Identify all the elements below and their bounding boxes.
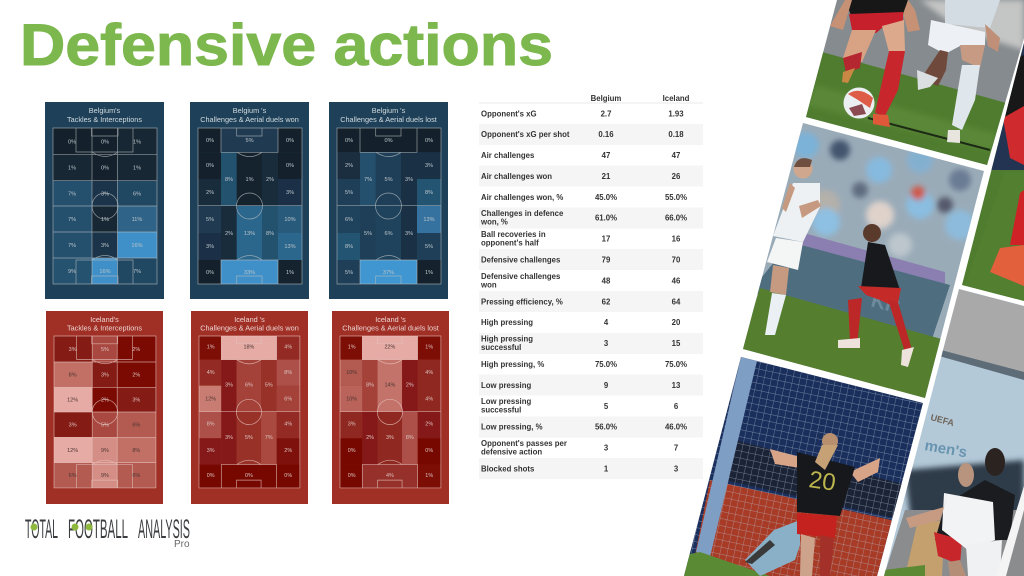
- heatmap pitch: 2%: [406, 383, 414, 389]
- table rows: 16: [672, 235, 681, 244]
- heatmap pitch: 5%: [265, 383, 273, 389]
- heatmap pitch: [53, 128, 157, 284]
- heatmap pitch: 4%: [284, 422, 292, 428]
- table header: [591, 94, 690, 103]
- table rows: 56.0%: [595, 423, 617, 432]
- heatmap pitch: 33%: [244, 270, 255, 276]
- heatmap pitch: 5%: [245, 138, 254, 144]
- Belgium player: [838, 224, 914, 367]
- heatmap pitch: 8%: [284, 370, 292, 376]
- heatmap pitch: 14%: [385, 383, 396, 389]
- table rows: 26: [672, 172, 681, 181]
- heatmap pitch: 6%: [133, 192, 141, 198]
- heatmap pitch: 3%: [101, 243, 109, 249]
- heatmap pitch: 0%: [348, 448, 356, 454]
- table rows: 2.7: [601, 109, 611, 118]
- panel title: [340, 106, 437, 124]
- table rows: 47: [672, 151, 680, 160]
- heatmap pitch: 0%: [425, 138, 433, 144]
- heatmap pitch: 9%: [101, 473, 109, 479]
- table rows: 3: [604, 339, 609, 348]
- heatmap pitch: 1%: [133, 140, 141, 146]
- heatmap pitch: 2%: [366, 435, 374, 441]
- heatmap pitch: 12%: [67, 448, 78, 454]
- table rows: Low pressing: [481, 397, 531, 406]
- panel title: Challenges & Aerial duels lost: [340, 115, 437, 124]
- heatmap pitch: 0%: [286, 163, 294, 169]
- table rows: [480, 109, 687, 474]
- heatmap pitch: 8%: [366, 383, 374, 389]
- text: ANALYSIS: [138, 514, 190, 544]
- heatmap pitch: 3%: [405, 177, 413, 183]
- heatmap pitch: 5%: [101, 423, 109, 429]
- heatmap pitch: 9%: [68, 269, 76, 275]
- heatmap pitch: 13%: [284, 244, 296, 250]
- heatmap pitch: 2%: [132, 372, 140, 378]
- table rows: 3: [604, 444, 609, 453]
- goal post: [1000, 486, 1024, 576]
- Belgium player: [830, 0, 920, 127]
- heatmap pitch: 0%: [207, 473, 215, 479]
- panel title: Tackles & Interceptions: [67, 115, 142, 124]
- table rows: High pressing: [481, 318, 533, 327]
- heatmap pitch: 3%: [225, 435, 233, 441]
- football: [844, 88, 874, 118]
- heatmap pitch: 2%: [132, 347, 140, 353]
- table rows: 46.0%: [665, 423, 687, 432]
- heatmap pitch: 8%: [225, 177, 233, 183]
- table rows: Low pressing: [481, 381, 531, 390]
- table rows: won, %: [480, 218, 508, 227]
- heatmap pitch: 2%: [425, 422, 433, 428]
- heatmap pitch: 3%: [207, 448, 215, 454]
- heatmap pitch: 22%: [385, 345, 396, 351]
- heatmap pitch: [340, 336, 441, 488]
- table rows: Blocked shots: [481, 464, 535, 474]
- logo: Total Football Analysis Pro: [25, 514, 190, 550]
- photo: crowd and players: KR: [869, 290, 903, 318]
- heatmap pitch: 5%: [245, 435, 253, 441]
- heatmap pitch: [198, 128, 302, 284]
- heatmap pitch: 5%: [364, 231, 372, 237]
- logo: Total Football Analysis Pro: TOTAL: [25, 514, 58, 544]
- title: Defensive actions: [20, 13, 553, 78]
- heatmap pitch: 1%: [348, 345, 356, 351]
- heatmap pitch: 7%: [265, 435, 273, 441]
- heatmap pitch: 7%: [68, 243, 76, 249]
- panel title: Iceland's: [90, 315, 119, 324]
- table rows: won: [480, 280, 497, 289]
- table rows: High pressing, %: [481, 360, 544, 369]
- heatmap pitch: 3%: [386, 435, 394, 441]
- heatmap pitch: 3%: [132, 398, 140, 404]
- heatmap pitch: 12%: [205, 396, 216, 402]
- heatmap pitch: 0%: [68, 140, 76, 146]
- table rows: Challenges in defence: [481, 209, 564, 218]
- table rows: 46: [672, 276, 681, 285]
- heatmap pitch: 8%: [406, 435, 414, 441]
- table rows: Opponent's passes per: [481, 439, 567, 448]
- panel title: Belgium 's: [233, 106, 267, 115]
- table rows: 64: [672, 297, 681, 306]
- heatmap pitch: 0%: [206, 138, 214, 144]
- heatmap pitch: 8%: [132, 448, 140, 454]
- table rows: High pressing: [481, 334, 533, 344]
- table rows: 75.0%: [595, 360, 617, 369]
- heatmap pitch: 0%: [286, 138, 294, 144]
- logo: Total Football Analysis Pro: Pro: [174, 539, 190, 550]
- heatmap pitch: 0%: [345, 138, 353, 144]
- heatmap pitch: 5%: [345, 190, 353, 196]
- heatmap pitch: 16%: [99, 269, 111, 275]
- heatmap pitch: 10%: [346, 396, 357, 402]
- panel: Belgium challenges and aerial duels lost: [329, 102, 448, 299]
- table rows: 70: [672, 256, 681, 264]
- heatmap pitch: 2%: [206, 190, 214, 196]
- table rows: 13: [672, 381, 681, 390]
- heatmap pitch: 3%: [425, 163, 433, 169]
- heatmap pitch: 7%: [68, 217, 76, 223]
- table header: Belgium: [591, 94, 621, 103]
- photo: red sock and shoe: [960, 40, 1024, 302]
- heatmap pitch: 0%: [284, 473, 292, 479]
- panel title: Challenges & Aerial duels won: [200, 115, 299, 124]
- heatmap pitch: 1%: [101, 217, 109, 223]
- heatmap pitch: 3%: [69, 347, 77, 353]
- heatmap pitch: 8%: [69, 372, 77, 378]
- table rows: 9: [604, 381, 609, 390]
- table rows: 75.0%: [665, 360, 687, 369]
- heatmap pitch: 3%: [101, 372, 109, 378]
- heatmap pitch: 8%: [207, 422, 215, 428]
- table rows: Pressing efficiency, %: [481, 297, 563, 306]
- heatmap pitch: 8%: [266, 231, 274, 237]
- panel title: [342, 315, 439, 332]
- panel: Iceland challenges and aerial duels won: [191, 311, 308, 504]
- heatmap pitch: 6%: [132, 473, 140, 479]
- heatmap pitch: 2%: [345, 163, 353, 169]
- heatmap pitch: 1%: [133, 166, 141, 172]
- table rows: Defensive challenges: [481, 256, 561, 264]
- heatmap pitch: 3%: [405, 231, 413, 237]
- panel: Belgium tackles and interceptions: [45, 102, 164, 299]
- heatmap pitch: 0%: [425, 448, 433, 454]
- table rows: 62: [602, 297, 611, 306]
- table rows: 6: [674, 402, 679, 411]
- heatmap pitch: 10%: [284, 217, 296, 223]
- Iceland player: [765, 158, 821, 335]
- heatmap pitch: 0%: [101, 140, 109, 146]
- table rows: Opponent's xG per shot: [481, 130, 570, 139]
- heatmap pitch: 9%: [101, 448, 109, 454]
- heatmap pitch: 13%: [244, 231, 255, 237]
- Belgium number 20 player: [770, 433, 880, 576]
- Belgium player behind: [934, 448, 1015, 565]
- heatmap pitch: 18%: [244, 345, 255, 351]
- table rows: 0.16: [598, 130, 614, 139]
- heatmap pitch: 4%: [284, 345, 292, 351]
- heatmap pitch: [337, 128, 441, 284]
- heatmap pitch: 1%: [425, 345, 433, 351]
- panel title: Belgium's: [89, 106, 121, 115]
- table rows: 45.0%: [595, 193, 617, 202]
- panel title: [200, 106, 299, 124]
- heatmap pitch: 4%: [425, 396, 433, 402]
- heatmap pitch: 3%: [206, 244, 214, 250]
- heatmap pitch: 4%: [425, 370, 433, 376]
- table rows: defensive action: [481, 448, 542, 456]
- heatmap pitch: [54, 336, 156, 488]
- table rows: 61.0%: [595, 214, 617, 223]
- table rows: 55.0%: [665, 193, 687, 202]
- heatmap pitch: 5%: [345, 270, 353, 276]
- heatmap pitch: 7%: [133, 269, 141, 275]
- table rows: opponent's half: [481, 238, 539, 248]
- photo: crowd and players: [740, 120, 990, 405]
- heatmap pitch: 10%: [346, 370, 357, 376]
- table header: Iceland: [663, 94, 690, 103]
- panel title: Challenges & Aerial duels won: [200, 324, 299, 332]
- table rows: 15: [672, 339, 681, 348]
- table rows: 47: [602, 151, 610, 160]
- heatmap pitch: 11%: [132, 217, 142, 223]
- heatmap pitch: 1%: [207, 345, 215, 351]
- table rows: 0.18: [668, 130, 684, 139]
- heatmap pitch: 0%: [245, 473, 253, 479]
- panel: Iceland tackles and interceptions: [46, 311, 163, 504]
- table rows: 1.93: [668, 109, 684, 118]
- panel: Belgium challenges and aerial duels won: [190, 102, 309, 299]
- photo: UEFA Women's player: UEFA: [929, 412, 956, 428]
- panel title: Tackles & Interceptions: [67, 324, 142, 332]
- panel title: Belgium 's: [372, 106, 406, 115]
- heatmap pitch: 0%: [101, 166, 109, 172]
- heatmap pitch: 12%: [67, 398, 78, 404]
- heatmap pitch: 6%: [132, 423, 140, 429]
- heatmap pitch: 1%: [68, 166, 76, 172]
- heatmap pitch: 3%: [101, 192, 109, 198]
- table rows: 20: [672, 318, 681, 327]
- table rows: Ball recoveries in: [481, 230, 546, 239]
- table rows: 48: [602, 276, 611, 285]
- heatmap pitch: 13%: [423, 217, 435, 223]
- heatmap pitch: 0%: [384, 138, 393, 144]
- heatmap pitch: 1%: [245, 177, 254, 183]
- heatmap pitch: 4%: [207, 370, 215, 376]
- heatmap pitch: 3%: [69, 423, 77, 429]
- table rows: 17: [602, 235, 610, 244]
- table rows: Air challenges won, %: [481, 193, 563, 202]
- heatmap pitch: 6%: [345, 217, 353, 223]
- heatmap pitch: 2%: [266, 177, 274, 183]
- heatmap pitch: 5%: [206, 217, 214, 223]
- photo: UEFA Women's player: men's: [923, 437, 968, 461]
- heatmap pitch: 2%: [225, 231, 233, 237]
- table rows: successful: [481, 343, 521, 352]
- heatmap pitch: 0%: [206, 270, 214, 276]
- table rows: Air challenges won: [481, 172, 552, 181]
- heatmap pitch: 0%: [206, 163, 214, 169]
- heatmap pitch: 0%: [348, 473, 356, 479]
- heatmap pitch: 3%: [225, 383, 233, 389]
- heatmap pitch: 6%: [284, 396, 292, 402]
- heatmap pitch: 2%: [284, 448, 292, 454]
- heatmap pitch: 5%: [101, 347, 109, 353]
- panel title: Iceland 's: [375, 315, 406, 324]
- heatmap pitch: 5%: [384, 177, 393, 183]
- photo: goal celebration: [680, 350, 930, 576]
- heatmap pitch: 3%: [348, 422, 356, 428]
- table rows: Air challenges: [481, 151, 535, 160]
- table rows: 79: [602, 256, 611, 264]
- table rows: 66.0%: [665, 214, 687, 223]
- heatmap pitch: 4%: [386, 473, 394, 479]
- heatmap pitch: 6%: [245, 383, 253, 389]
- heatmap pitch: 1%: [425, 473, 433, 479]
- heatmap pitch: 6%: [69, 473, 77, 479]
- heatmap pitch: 16%: [131, 243, 143, 249]
- table rows: 1: [604, 464, 609, 474]
- panel title: [67, 106, 142, 124]
- heatmap pitch: 1%: [286, 270, 294, 276]
- heatmap pitch: 1%: [425, 270, 433, 276]
- panel title: [200, 315, 299, 332]
- table rows: 5: [604, 402, 609, 411]
- table rows: successful: [481, 406, 521, 415]
- photo: legs and ball: [800, 0, 1024, 170]
- table rows: 3: [674, 464, 679, 474]
- Belgium number 20 player: 20: [807, 466, 837, 497]
- logo: Total Football Analysis Pro: FOOTBALL: [68, 514, 128, 544]
- heatmap pitch: 8%: [345, 244, 353, 250]
- photo: UEFA Women's player: [880, 285, 1024, 576]
- heatmap pitch: 8%: [425, 190, 433, 196]
- heatmap pitch: 5%: [425, 244, 433, 250]
- heatmap pitch: 6%: [384, 231, 393, 237]
- heatmap pitch: 37%: [383, 270, 394, 276]
- heatmap pitch: 7%: [68, 192, 76, 198]
- table rows: Low pressing, %: [481, 423, 543, 432]
- comparison table: [479, 94, 703, 479]
- panel title: [67, 315, 142, 332]
- heatmap pitch: 2%: [101, 398, 109, 404]
- table rows: 7: [674, 444, 678, 453]
- table rows: Defensive challenges: [481, 272, 561, 281]
- heatmap pitch: 3%: [286, 190, 294, 196]
- table rows: 21: [602, 172, 611, 181]
- heatmap pitch: 7%: [364, 177, 372, 183]
- Iceland player: [917, 0, 1000, 143]
- table rows: 4: [604, 318, 609, 327]
- panel: Iceland challenges and aerial duels lost: [332, 311, 449, 504]
- table rows: Opponent's xG: [481, 109, 537, 118]
- panel title: Challenges & Aerial duels lost: [342, 324, 439, 332]
- panel title: Iceland 's: [234, 315, 265, 324]
- Iceland player front: [906, 463, 1002, 576]
- heatmap pitch: [199, 336, 300, 488]
